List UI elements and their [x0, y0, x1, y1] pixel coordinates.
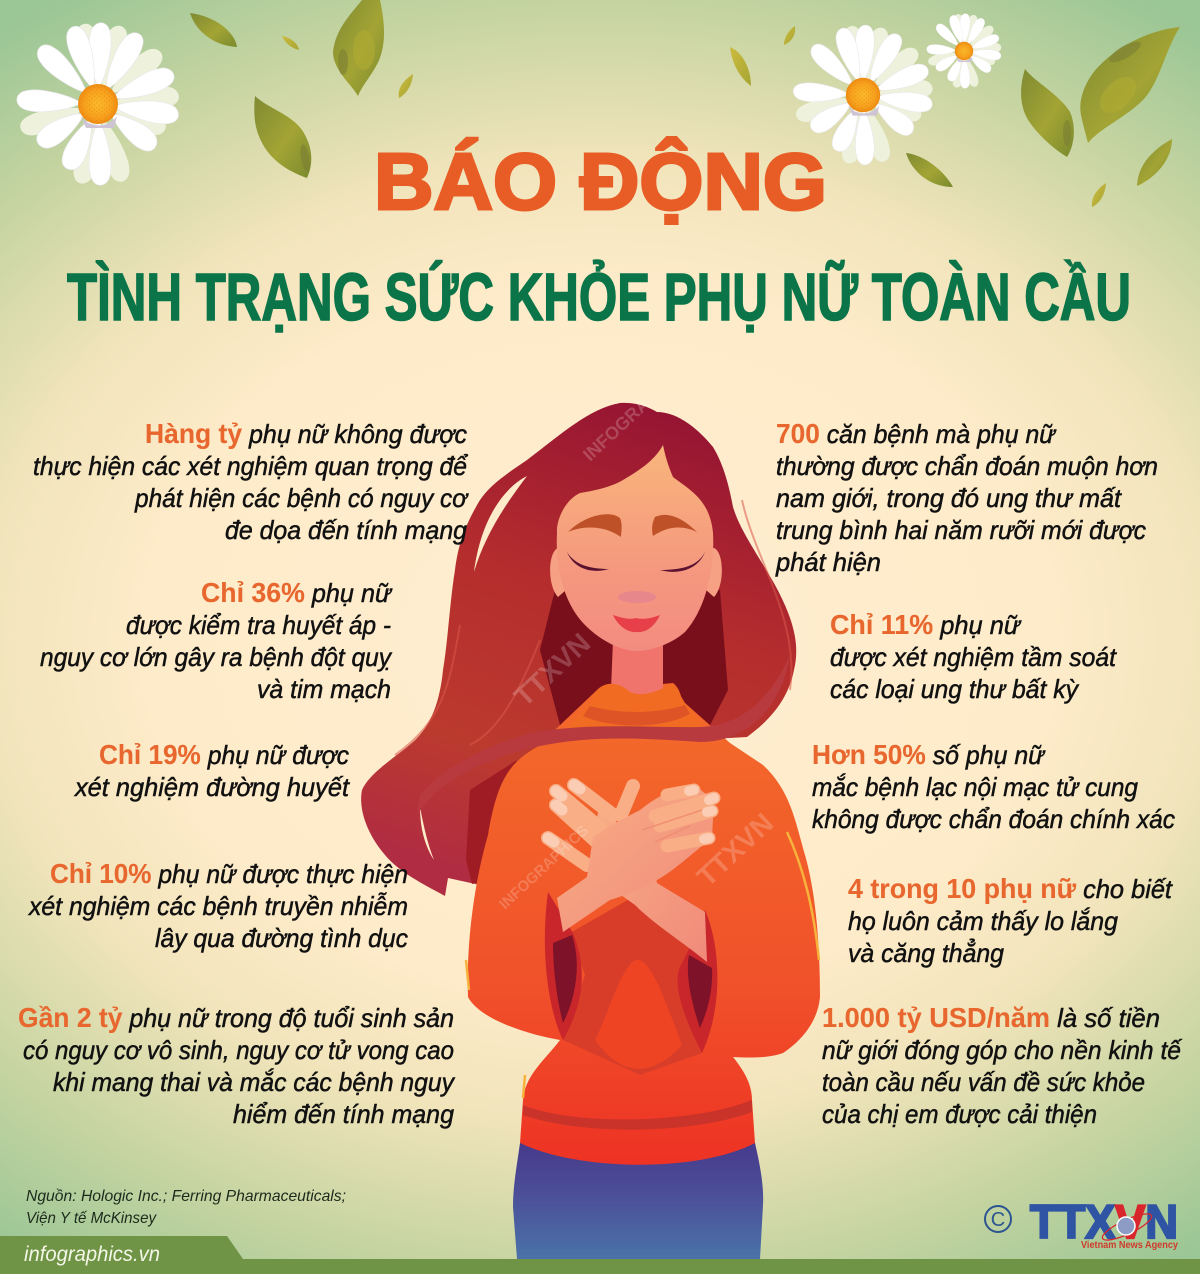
text block: hơn 50%: không được chẩn đoán chính xác — [812, 804, 1175, 834]
text block: gần 2 tỷ: Gần 2 tỷ phụ nữ trong độ tuổi sinh sản — [18, 1002, 454, 1033]
logo: TTXVN — [985, 1195, 1178, 1251]
text block: 4 trong 10: họ luôn cảm thấy lo lắng — [848, 906, 1119, 936]
text block: chỉ 11%: được xét nghiệm tầm soát — [830, 642, 1118, 672]
text block: 700 căn bệnh: thường được chẩn đoán muộn hơn — [776, 451, 1158, 481]
text block: chỉ 11% — [830, 609, 1118, 704]
copyright mark: C — [991, 1209, 1005, 1231]
text block: hàng tỷ: Hàng tỷ phụ nữ không được — [145, 418, 467, 449]
text block: 700 căn bệnh: phát hiện — [775, 547, 881, 577]
text block: 4 trong 10 — [848, 873, 1174, 968]
text block: 1.000 tỷ USD — [822, 1002, 1182, 1129]
hair gaps — [420, 476, 527, 860]
illustration: woman — [361, 394, 820, 1259]
collar — [565, 683, 703, 738]
right sleeve opening — [678, 910, 717, 1053]
text block: hàng tỷ — [33, 418, 469, 545]
globe — [1100, 1209, 1154, 1245]
text block: gần 2 tỷ: hiểm đến tính mạng — [233, 1099, 455, 1129]
text block: gần 2 tỷ — [18, 1002, 456, 1129]
eyebrows — [568, 514, 697, 537]
eyes closed — [567, 552, 705, 572]
sweater centre — [595, 960, 682, 1069]
text block: chỉ 36% — [40, 577, 393, 704]
text block: chỉ 11%: Chỉ 11% phụ nữ — [830, 609, 1021, 640]
text block: chỉ 10% — [27, 858, 408, 953]
text block: hơn 50% — [812, 739, 1175, 834]
source text: Viện Y tế McKinsey — [26, 1210, 157, 1227]
sweater body — [468, 683, 820, 1165]
text block: chỉ 19%: xét nghiệm đường huyết — [73, 772, 351, 802]
text block: hàng tỷ: phát hiện các bệnh có nguy cơ — [134, 483, 469, 513]
copyright mark — [985, 1206, 1011, 1232]
text block: hàng tỷ: đe dọa đến tính mạng — [225, 515, 468, 545]
text block: 4 trong 10: 4 trong 10 phụ nữ cho biết — [848, 873, 1174, 904]
jeans — [513, 1130, 763, 1259]
watermarks: TTXVN — [691, 807, 779, 892]
watermarks: TTXVN — [508, 627, 596, 712]
text block: hơn 50%: Hơn 50% số phụ nữ — [812, 739, 1045, 770]
text block: hơn 50%: mắc bệnh lạc nội mạc tử cung — [812, 772, 1139, 802]
right sleeve inner — [688, 955, 712, 1028]
text block: gần 2 tỷ: có nguy cơ vô sinh, nguy cơ tử vong cao — [23, 1035, 454, 1065]
front hand — [557, 788, 714, 932]
wordmark: TTXVN — [1030, 1195, 1178, 1248]
dark hair behind neck — [540, 590, 728, 745]
collar shade — [583, 705, 690, 726]
text block: chỉ 36%: nguy cơ lớn gây ra bệnh đột quỵ — [40, 642, 393, 672]
back hand — [548, 785, 707, 962]
source text — [26, 1188, 346, 1227]
sweater waist — [523, 1100, 752, 1130]
text block: chỉ 36%: Chỉ 36% phụ nữ — [201, 577, 392, 608]
text block: gần 2 tỷ: khi mang thai và mắc các bệnh nguy — [53, 1067, 456, 1097]
ears — [550, 548, 722, 597]
left sleeve inner — [553, 935, 577, 1023]
text block: chỉ 19%: Chỉ 19% phụ nữ được — [99, 739, 349, 770]
neck — [611, 640, 663, 705]
sleeve rims — [466, 832, 819, 1098]
face — [557, 445, 713, 651]
text block: 700 căn bệnh — [775, 418, 1158, 577]
text block: chỉ 10%: lây qua đường tình dục — [155, 923, 408, 953]
agency tagline: Vietnam News Agency — [1081, 1240, 1178, 1251]
source text: Nguồn: Hologic Inc.; Ferring Pharmaceuticals; — [26, 1188, 346, 1205]
left sleeve opening — [545, 892, 582, 1040]
sweater shading — [563, 893, 702, 1075]
text block: chỉ 11%: các loại ung thư bất kỳ — [830, 674, 1080, 704]
daisy left — [16, 22, 180, 186]
heading: báo động: BÁO ĐỘNG — [374, 137, 827, 226]
text block: 1.000 tỷ USD: 1.000 tỷ USD/năm là số tiền — [822, 1002, 1160, 1033]
hair highlights — [395, 500, 791, 755]
daisy small — [926, 13, 1002, 89]
daisy middle — [793, 25, 934, 165]
text block: chỉ 19% — [73, 739, 351, 802]
mouth — [613, 615, 660, 632]
nose — [618, 591, 656, 603]
text block: 1.000 tỷ USD: nữ giới đóng góp cho nền kinh tế — [822, 1035, 1182, 1065]
text block: chỉ 10%: xét nghiệm các bệnh truyền nhiễm — [27, 891, 408, 921]
text block: 4 trong 10: và căng thẳng — [848, 938, 1005, 968]
text block: chỉ 36%: được kiểm tra huyết áp - — [126, 610, 391, 640]
watermarks: INFOGRAPHICS — [496, 822, 592, 913]
text block: chỉ 10%: Chỉ 10% phụ nữ được thực hiện — [50, 858, 408, 889]
website label: infographics.vn — [24, 1243, 160, 1266]
footer bar — [0, 1236, 1200, 1274]
text block: 1.000 tỷ USD: của chị em được cải thiện — [822, 1099, 1097, 1129]
text block: 700 căn bệnh: nam giới, trong đó ung thư mất — [776, 483, 1123, 513]
hair under shoulder — [466, 760, 517, 884]
text block: 700 căn bệnh: trung bình hai năm rưỡi mới được — [776, 515, 1146, 545]
text block: hàng tỷ: thực hiện các xét nghiệm quan trọng để — [33, 451, 468, 481]
watermarks — [496, 394, 779, 913]
watermarks: INFOGRA — [579, 394, 653, 465]
text block: 700 căn bệnh: 700 căn bệnh mà phụ nữ — [776, 418, 1056, 449]
title — [67, 137, 1131, 335]
back hair — [361, 403, 796, 896]
text block: 1.000 tỷ USD: toàn cầu nếu vấn đề sức khỏe — [822, 1067, 1145, 1097]
hair strand over shoulder — [417, 655, 790, 815]
leaves decoration — [190, 0, 1180, 207]
text block: chỉ 36%: và tim mạch — [257, 674, 391, 704]
